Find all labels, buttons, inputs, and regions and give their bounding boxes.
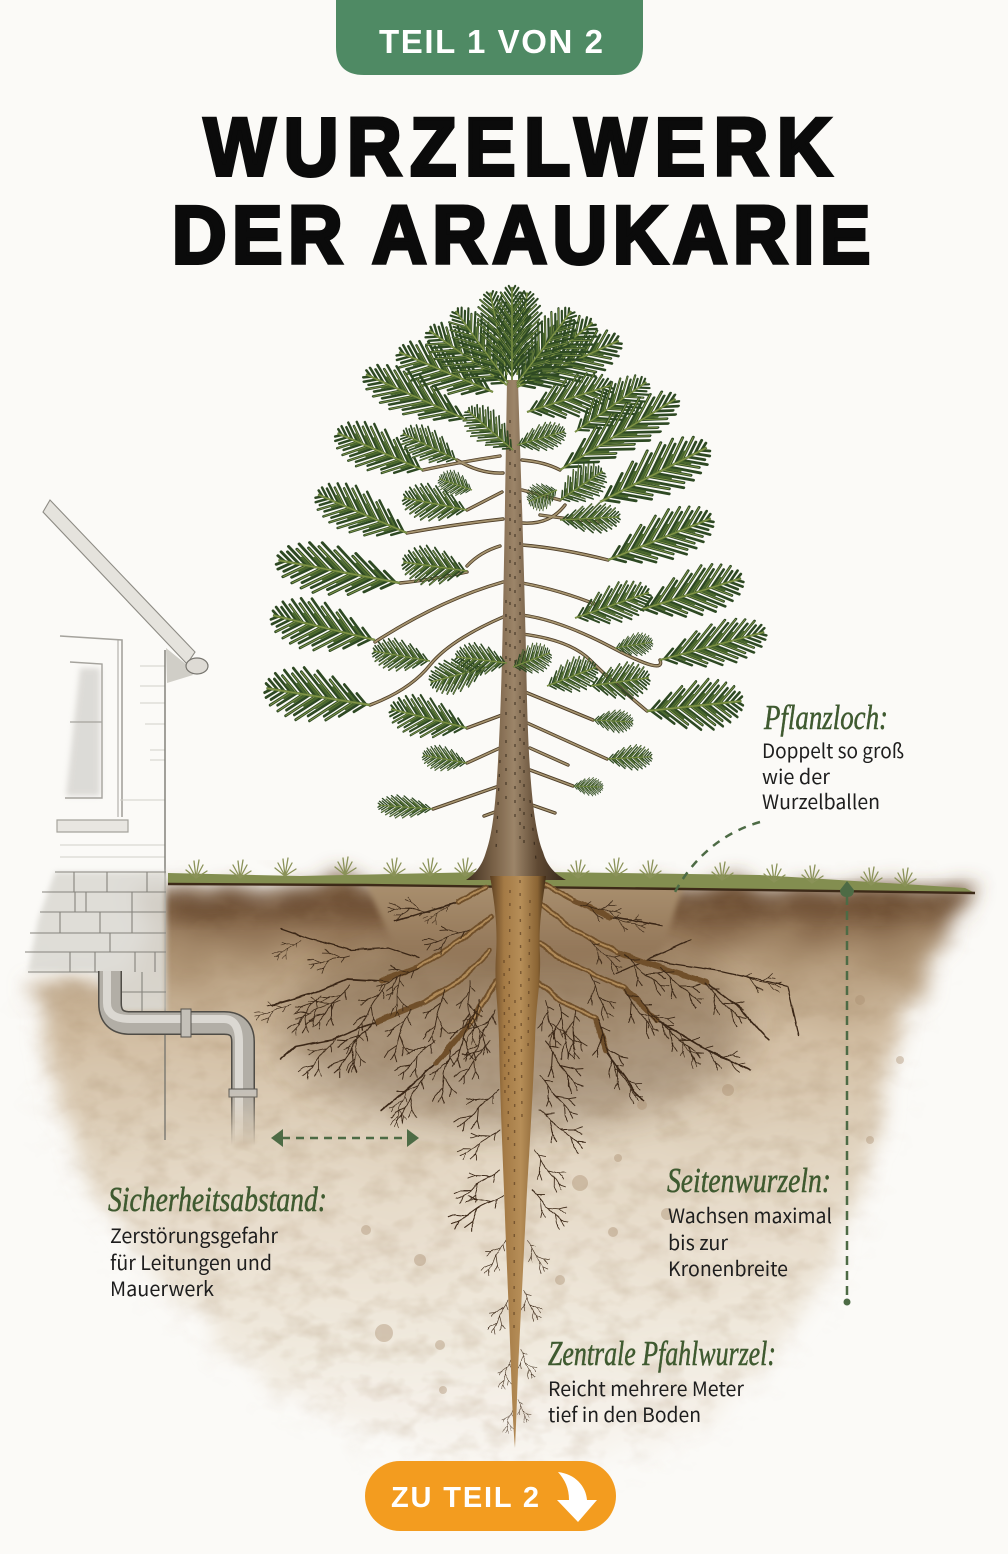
trunk	[466, 380, 566, 880]
branches	[370, 456, 661, 816]
callout: Pflanzloch: Wurzelballen	[762, 786, 880, 815]
window	[57, 636, 128, 832]
callout: Seitenwurzeln: bis zur	[668, 1227, 728, 1256]
callout: Sicherheitsabstand: für Leitungen und	[110, 1247, 272, 1276]
callout: Sicherheitsabstand: Zerstörungsgefahr	[110, 1220, 278, 1249]
top banner: TEIL 1 VON 2	[336, 0, 643, 75]
arrow: Pflanzloch pointer	[675, 822, 760, 892]
callout: Zentrale Pfahlwurzel: tief in den Boden	[548, 1399, 701, 1428]
callout: Zentrale Pfahlwurzel	[548, 1334, 776, 1428]
title: WURZELWERK	[204, 101, 832, 193]
root system	[253, 876, 799, 1448]
planting pit	[366, 884, 684, 970]
callout: Sicherheitsabstand	[108, 1180, 327, 1302]
callout: Zentrale Pfahlwurzel: Zentrale Pfahlwurzel:	[548, 1334, 776, 1373]
callout: Seitenwurzeln: Seitenwurzeln:	[667, 1161, 831, 1200]
wall siding lines	[60, 666, 165, 857]
callout: Pflanzloch: Pflanzloch:	[763, 698, 888, 737]
callout: Pflanzloch: Doppelt so groß	[762, 735, 904, 764]
button: ZU TEIL 2: ZU TEIL 2	[391, 1482, 539, 1514]
tree	[261, 286, 771, 880]
wall edge	[164, 650, 166, 1140]
tap root texture	[504, 880, 530, 1330]
arrow: lateral root depth	[840, 881, 854, 1306]
callout: Seitenwurzeln: Wachsen maximal	[668, 1200, 832, 1229]
house	[25, 500, 208, 1140]
top banner: TEIL 1 VON 2: TEIL 1 VON 2	[379, 23, 603, 60]
tap root	[490, 876, 546, 1448]
callout: Pflanzloch	[762, 698, 904, 815]
callout: Sicherheitsabstand: Mauerwerk	[110, 1273, 214, 1302]
callout: Sicherheitsabstand: Sicherheitsabstand:	[108, 1180, 327, 1219]
roof	[43, 500, 195, 664]
callout: Seitenwurzeln	[667, 1161, 832, 1282]
arrow: safety distance	[271, 1129, 419, 1147]
rootlets	[253, 892, 784, 1435]
lateral roots	[273, 902, 799, 1111]
callout: Zentrale Pfahlwurzel: Reicht mehrere Meter	[548, 1373, 744, 1402]
drain pipe	[107, 971, 257, 1150]
foliage	[261, 286, 771, 820]
title	[172, 101, 870, 281]
stone base	[25, 872, 166, 1012]
grass strip	[168, 857, 975, 893]
icon: down arrow	[557, 1472, 597, 1522]
title: DER ARAUKARIE	[172, 189, 870, 281]
callout: Pflanzloch: wie der	[762, 761, 830, 790]
callout: Seitenwurzeln: Kronenbreite	[668, 1253, 788, 1282]
button: ZU TEIL 2	[365, 1461, 616, 1531]
soil cross-section	[35, 884, 975, 1469]
bark marks	[496, 420, 536, 860]
soffit and gutter	[166, 648, 193, 683]
